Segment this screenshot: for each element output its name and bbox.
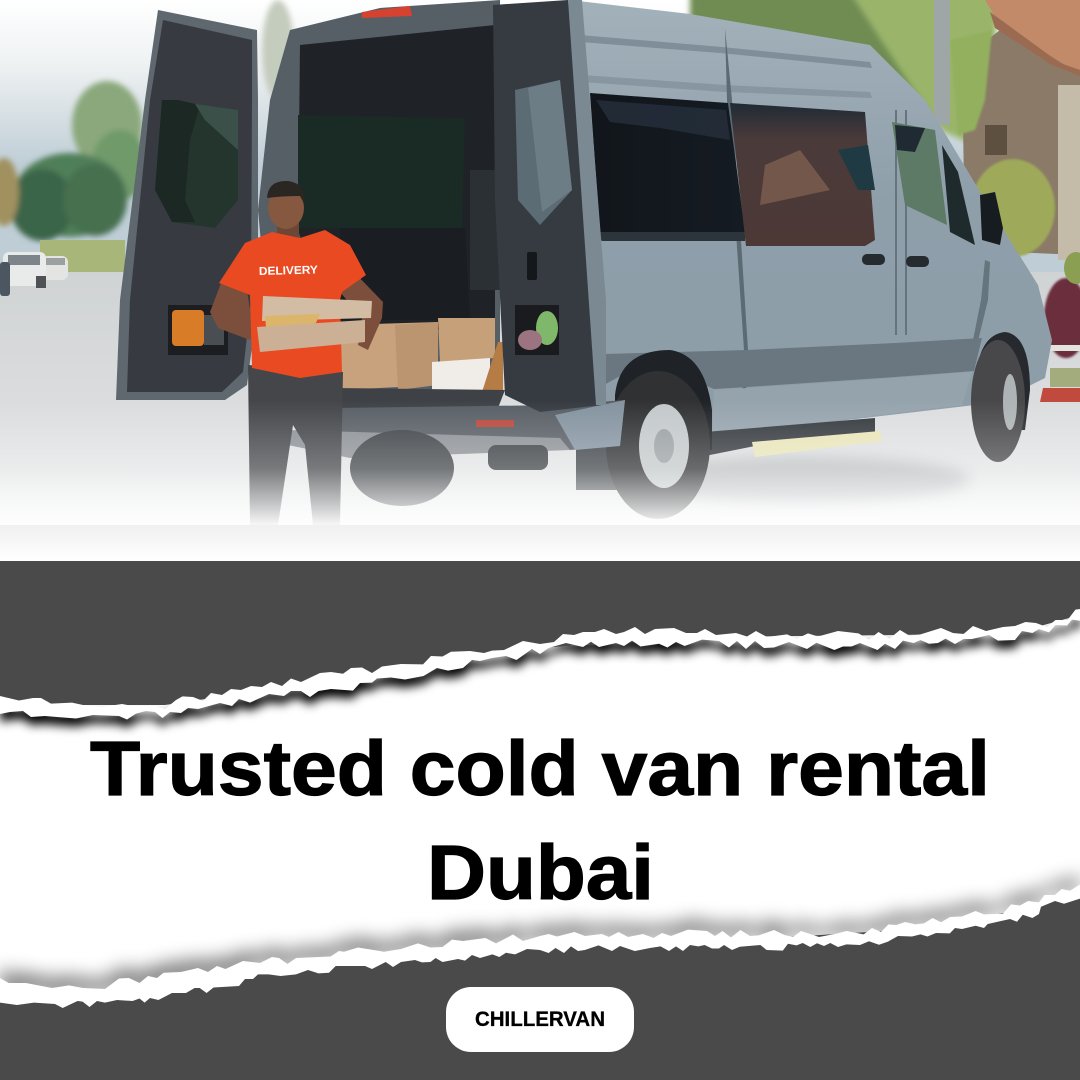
sliding side windows <box>590 93 875 246</box>
brand button: CHILLERVAN <box>475 1008 605 1031</box>
van body side <box>570 0 1052 519</box>
title: Dubai <box>427 830 654 916</box>
red T-shirt: DELIVERY <box>259 264 318 278</box>
background street scene <box>0 0 1080 525</box>
right rear door <box>493 0 606 412</box>
pale gradient band below photo <box>0 525 1080 561</box>
title: Trusted cold van rental <box>90 726 990 812</box>
dark background panel <box>0 561 1080 1080</box>
trousers <box>248 365 343 525</box>
front wheel arch and wheel <box>971 332 1030 462</box>
rear wheel arch and wheel <box>576 350 712 519</box>
foliage and house <box>690 0 1080 402</box>
cargo boxes <box>340 318 503 395</box>
red T-shirt <box>219 230 366 378</box>
head <box>267 181 305 238</box>
delivery man <box>210 181 383 525</box>
carried boxes <box>257 296 372 352</box>
title <box>90 726 990 916</box>
torn white paper band <box>0 609 1080 1008</box>
brand button <box>446 987 634 1052</box>
van ground shadow <box>630 456 970 504</box>
cab windows <box>892 122 1003 245</box>
van rear cargo opening <box>258 0 625 506</box>
cargo floor and bumper <box>288 388 625 506</box>
bottom white fade of the photo <box>0 400 1080 525</box>
parked cars <box>0 252 68 296</box>
door handles <box>862 254 929 267</box>
lower door trim <box>604 338 982 389</box>
arms <box>210 270 383 350</box>
photo: delivery man unloading a grey van <box>0 0 1080 525</box>
left rear door <box>116 10 258 400</box>
running board step <box>705 418 882 457</box>
